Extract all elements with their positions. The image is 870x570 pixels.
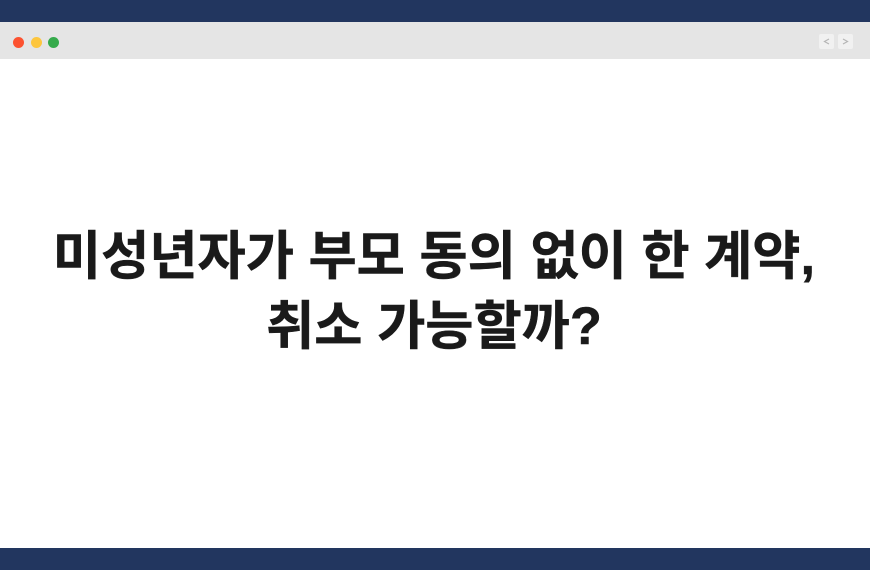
icon: red window dot: [13, 37, 24, 48]
title: [53, 228, 815, 356]
icon: green window dot: [48, 37, 59, 48]
icon: forward button: [838, 34, 853, 49]
browser toolbar: [0, 22, 870, 59]
title line 1: 미성년자가 부모 동의 없이 한 계약,: [53, 228, 815, 286]
title line 2: 취소 가능할까?: [266, 298, 602, 356]
icon: yellow window dot: [31, 37, 42, 48]
bottom navy bar: [0, 548, 870, 570]
top navy bar: [0, 0, 870, 22]
icon: back button: [819, 34, 834, 49]
